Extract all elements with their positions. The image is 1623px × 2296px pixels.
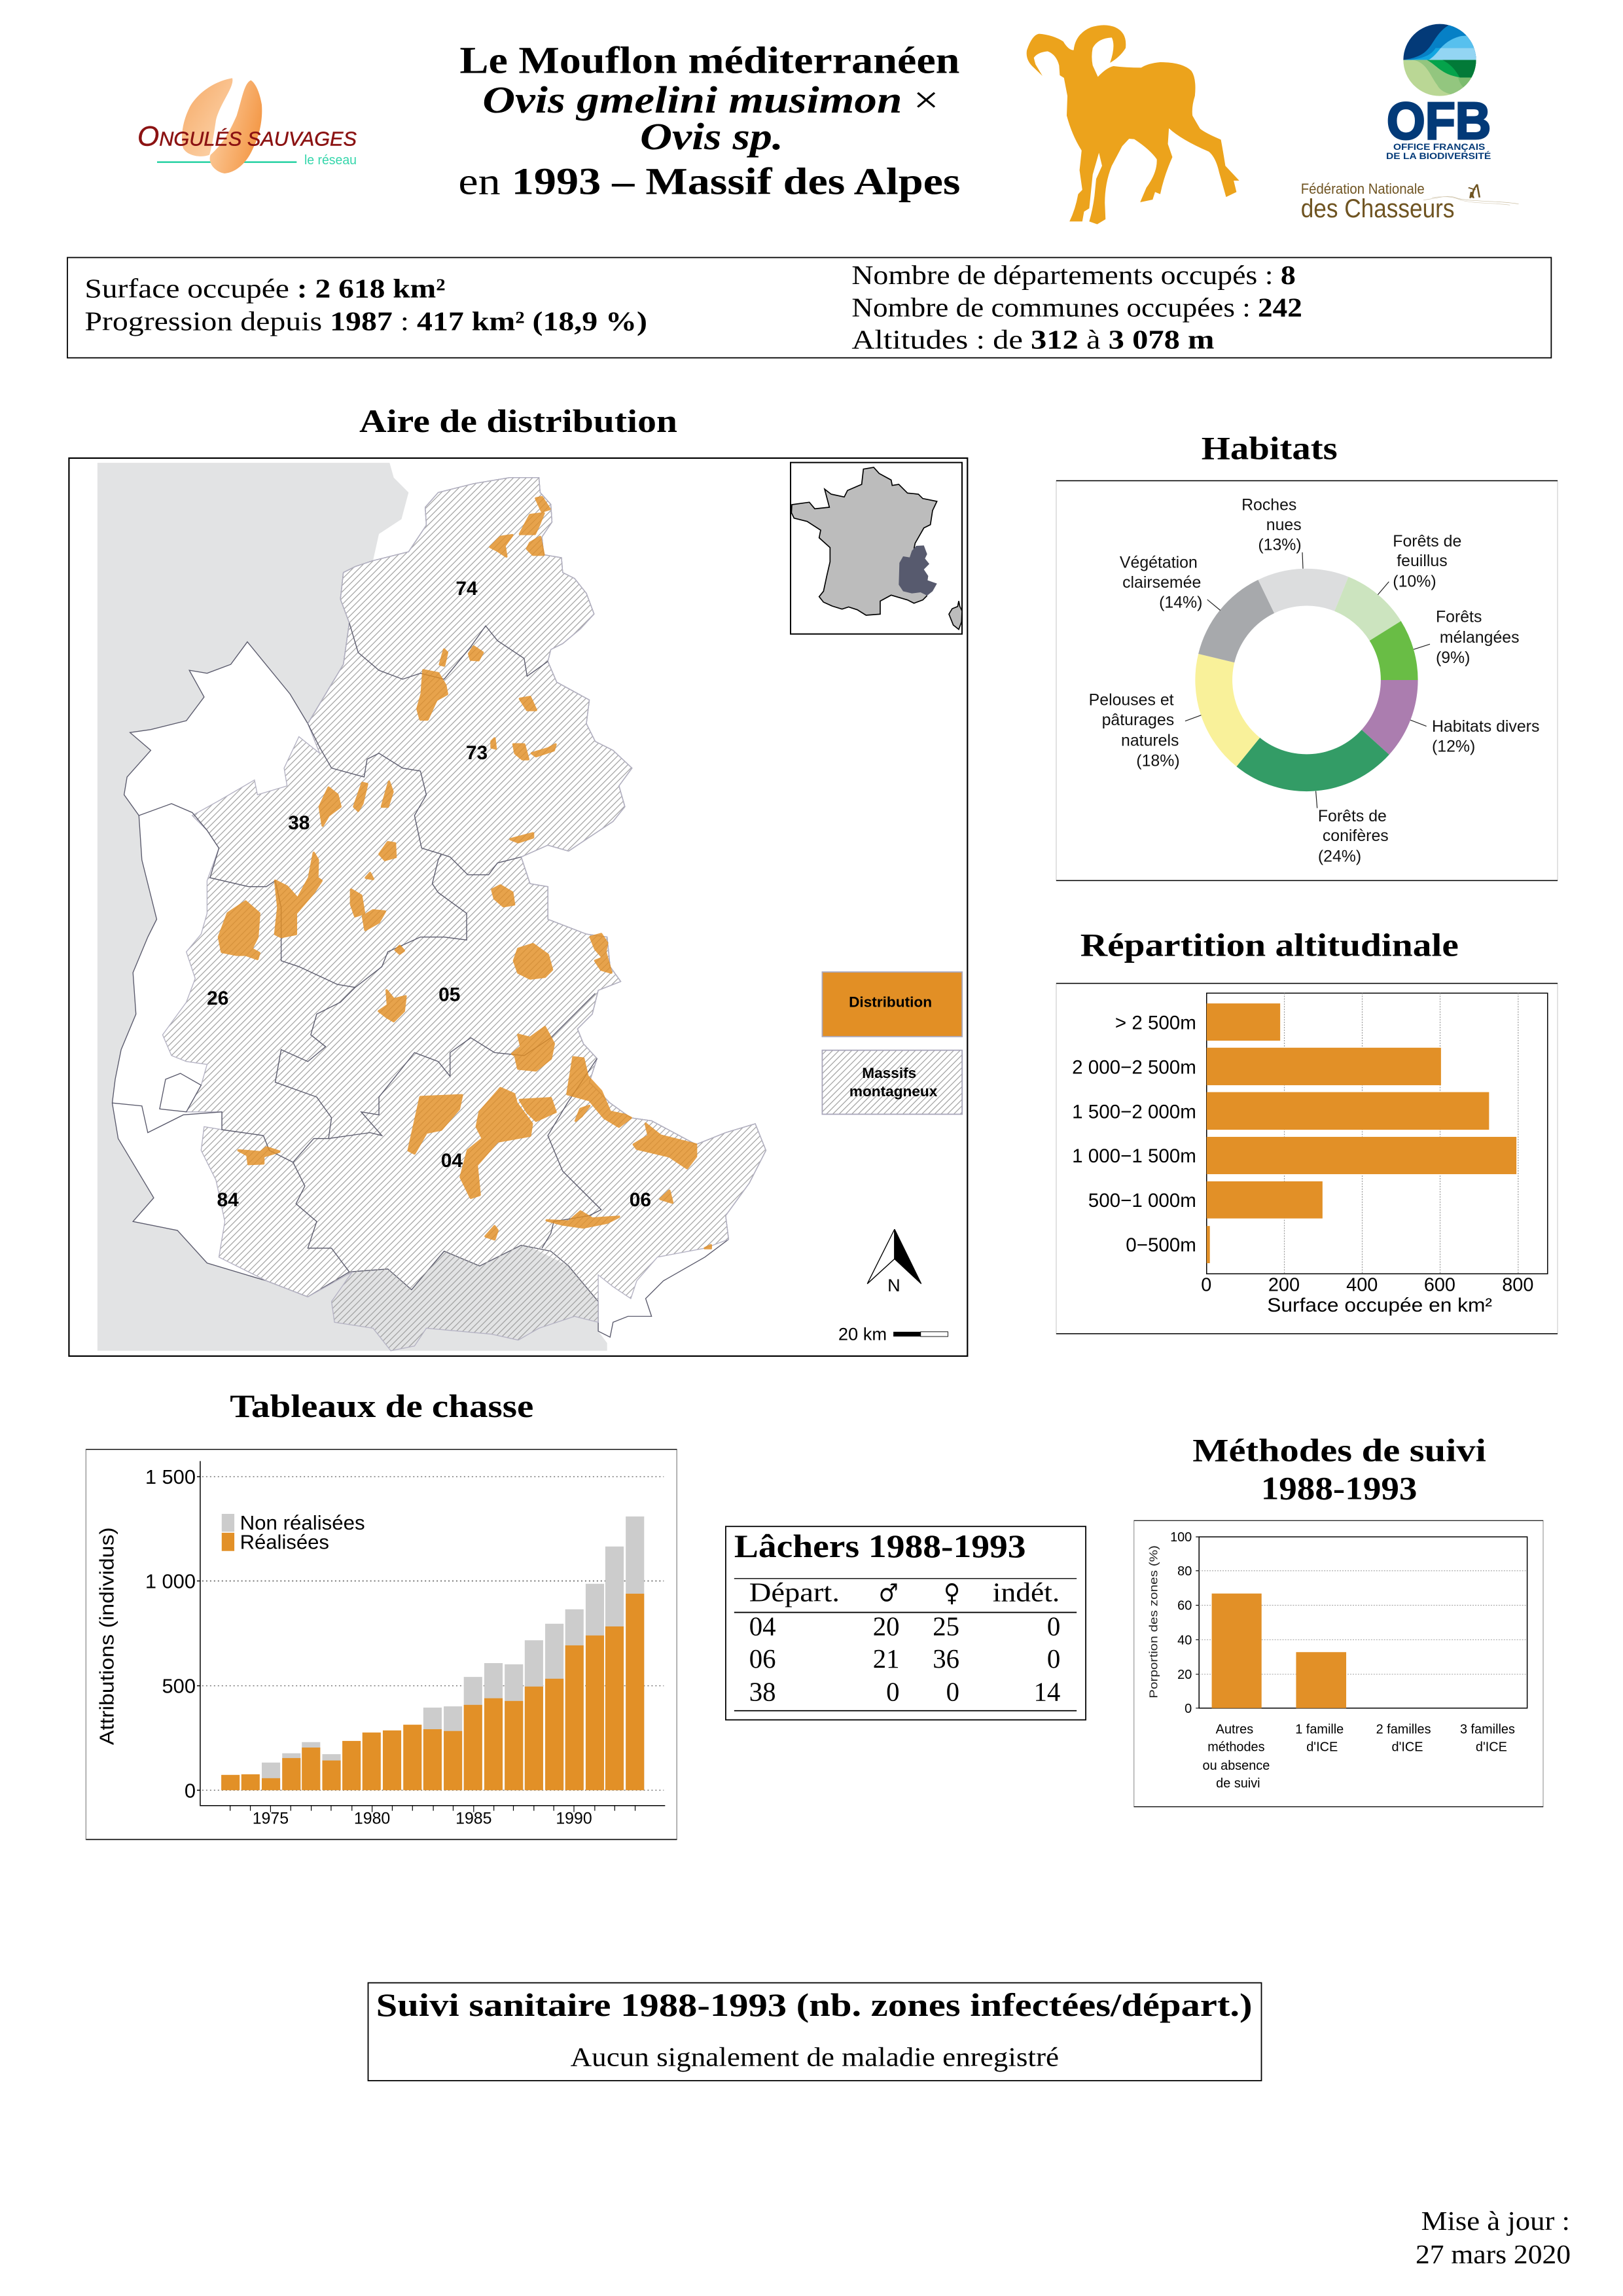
- y axis labels: 100: [1170, 1530, 1192, 1545]
- update date: [1416, 2206, 1571, 2269]
- panel: altitude bar chart: Surface occupée en km²: [1267, 1295, 1492, 1316]
- x axis labels: 1985: [455, 1810, 491, 1828]
- table rows: 20: [873, 1611, 900, 1641]
- departments base: [113, 478, 766, 1337]
- category labels: d'ICE: [1306, 1740, 1338, 1754]
- panel: key figures: Surface occupée : 2 618 km²: [84, 274, 446, 304]
- slice labels: Végétation: [1120, 553, 1198, 571]
- department labels: 05: [438, 984, 460, 1005]
- panel: monitoring methods chart: [1134, 1520, 1543, 1807]
- panel: key figures: [67, 257, 1551, 358]
- table header: ♂: [879, 1579, 899, 1607]
- slice labels: (12%): [1432, 737, 1475, 755]
- leader lines: [1185, 552, 1430, 808]
- category labels: méthodes: [1207, 1740, 1265, 1754]
- update date: 27 mars 2020: [1416, 2239, 1571, 2269]
- department labels: 73: [466, 742, 488, 764]
- bars: [1212, 1594, 1346, 1708]
- slice labels: pâturages: [1102, 711, 1174, 729]
- heading: Tableaux de chasse: Tableaux de chasse: [230, 1388, 533, 1424]
- y axis labels: 1 000: [145, 1570, 196, 1592]
- altitude labels: 2 000−2 500m: [1072, 1056, 1196, 1078]
- legend: massifs montagneux: Massifs: [862, 1065, 916, 1081]
- table rows: 06: [749, 1644, 776, 1674]
- title: Ovis gmelini musimon ×: [482, 80, 939, 121]
- table rows: 25: [933, 1611, 959, 1641]
- category labels: d'ICE: [1476, 1740, 1507, 1754]
- slice labels: Forêts: [1436, 607, 1482, 626]
- x axis labels: 800: [1502, 1274, 1533, 1295]
- table header: Départ.: [749, 1578, 840, 1607]
- axes: [200, 1461, 665, 1806]
- neighbouring areas background: [98, 463, 607, 1351]
- logo: OFB: OFFICE FRANÇAIS: [1393, 141, 1485, 152]
- table header: ♀: [944, 1579, 960, 1607]
- category labels: 2 familles: [1376, 1723, 1431, 1737]
- stacked bars: [221, 1516, 644, 1790]
- category labels: d'ICE: [1392, 1740, 1423, 1754]
- title: Ovis sp.: [640, 117, 783, 158]
- y axis title: Porportion des zones (%): [1147, 1545, 1160, 1698]
- slice labels: (10%): [1393, 572, 1436, 590]
- panel: suivi sanitaire: Suivi sanitaire 1988-1993 (nb. zones infectées/départ.): [376, 1986, 1253, 2023]
- logo: Ongulés sauvages: le réseau: [304, 152, 357, 168]
- department labels: [207, 578, 651, 1211]
- legend: [222, 1511, 365, 1554]
- legend: Réalisées: [240, 1531, 329, 1554]
- x axis labels: 1975: [253, 1810, 289, 1828]
- x axis labels: 1980: [354, 1810, 390, 1828]
- y axis labels: 60: [1177, 1599, 1192, 1613]
- category labels: Autres: [1216, 1723, 1253, 1737]
- table rows: 0: [886, 1677, 900, 1706]
- panel: hunting bag chart: [86, 1450, 677, 1839]
- slice labels: Forêts de: [1393, 532, 1461, 550]
- panel: key figures: Progression depuis 1987 : 417 km² (18,9 %): [84, 306, 647, 336]
- inset map: France: [791, 463, 962, 634]
- panel: key figures: Nombre de départements occupés : 8: [851, 260, 1296, 291]
- bars: [1207, 1003, 1516, 1263]
- table rows: 04: [749, 1611, 776, 1641]
- scale bar: 20 km: [838, 1323, 887, 1344]
- y axis labels: [1170, 1530, 1192, 1716]
- logo: OFB: [1386, 22, 1491, 161]
- slice labels: (18%): [1136, 751, 1180, 770]
- x axis labels: 400: [1346, 1274, 1378, 1295]
- scale bar: [838, 1323, 948, 1344]
- category labels: de suivi: [1216, 1776, 1260, 1791]
- slice labels: Pelouses et: [1089, 691, 1174, 709]
- y axis labels: 0: [1185, 1702, 1192, 1716]
- slice labels: (9%): [1436, 649, 1470, 667]
- x axis labels: [1201, 1274, 1533, 1295]
- altitude labels: 1 000−1 500m: [1072, 1145, 1196, 1167]
- slice labels: nues: [1266, 516, 1302, 534]
- heading: Méthodes de suivi: [1192, 1433, 1486, 1506]
- altitude labels: 1 500−2 000m: [1072, 1101, 1196, 1122]
- panel: suivi sanitaire: Aucun signalement de maladie enregistré: [571, 2042, 1059, 2072]
- donut slices: [1195, 569, 1418, 791]
- legend: distribution: [822, 972, 962, 1037]
- y axis labels: 80: [1177, 1564, 1192, 1579]
- update date: Mise à jour :: [1421, 2206, 1570, 2236]
- heading: Aire de distribution: Aire de distribution: [359, 403, 677, 439]
- department labels: 84: [217, 1189, 239, 1211]
- y axis labels: 20: [1177, 1668, 1192, 1682]
- table: Lâchers 1988-1993: [726, 1526, 1086, 1720]
- table rows: 14: [1034, 1677, 1060, 1706]
- slice labels: Habitats divers: [1432, 717, 1539, 736]
- panel: suivi sanitaire: [368, 1983, 1262, 2081]
- title: Le Mouflon méditerranéen: [459, 40, 959, 81]
- panel: habitats donut chart: [1056, 481, 1558, 880]
- category labels: [1203, 1723, 1515, 1791]
- heading: Méthodes de suivi: Méthodes de suivi: [1192, 1433, 1486, 1469]
- department labels: 26: [207, 988, 228, 1009]
- heading: Méthodes de suivi: 1988-1993: [1261, 1470, 1417, 1506]
- altitude labels: 0−500m: [1126, 1234, 1196, 1256]
- x axis labels: 600: [1424, 1274, 1455, 1295]
- slice labels: [1089, 495, 1539, 866]
- y axis labels: 0: [185, 1779, 196, 1802]
- table header: indét.: [993, 1578, 1060, 1607]
- panel: key figures: Altitudes : de 312 à 3 078 m: [851, 325, 1215, 355]
- slice labels: clairsemée: [1122, 573, 1201, 592]
- logo: Ongulés sauvages: [137, 78, 357, 173]
- slice labels: (14%): [1159, 594, 1202, 612]
- logo: OFB: DE LA BIODIVERSITÉ: [1386, 151, 1491, 161]
- panel: key figures: Nombre de communes occupées : 242: [851, 293, 1302, 323]
- slice labels: naturels: [1121, 731, 1179, 749]
- slice labels: feuillus: [1397, 552, 1448, 570]
- department boundaries: [113, 623, 601, 1272]
- category labels: ou absence: [1203, 1759, 1270, 1773]
- legend: distribution: Distribution: [849, 994, 932, 1011]
- distribution areas: [219, 497, 711, 1248]
- y axis title: Attributions (individus): [96, 1527, 118, 1745]
- table rows: 0: [946, 1677, 959, 1706]
- icon: north arrow: [867, 1229, 921, 1295]
- heading: Répartition altitudinale: Répartition altitudinale: [1080, 927, 1459, 963]
- table header: [749, 1578, 1060, 1607]
- y axis labels: 40: [1177, 1633, 1192, 1647]
- y axis labels: 1 500: [145, 1465, 196, 1488]
- slice labels: (24%): [1318, 848, 1361, 866]
- altitude labels: 500−1 000m: [1088, 1190, 1196, 1211]
- department labels: 06: [630, 1189, 651, 1211]
- slice labels: conifères: [1323, 827, 1389, 845]
- title: [458, 40, 960, 202]
- icon: mouflon silhouette: [1027, 25, 1240, 224]
- table rows: 38: [749, 1677, 776, 1706]
- panel: distribution map: [69, 458, 967, 1356]
- x axis labels: [253, 1810, 592, 1828]
- legend: massifs montagneux: montagneux: [849, 1083, 938, 1100]
- logo: OFB: OFB: [1387, 92, 1491, 150]
- table rows: 36: [933, 1644, 959, 1674]
- logo: Fédération Nationale des Chasseurs: Fédération Nationale: [1301, 181, 1425, 197]
- logo: Fédération Nationale des Chasseurs: des Chasseurs: [1301, 194, 1455, 223]
- department labels: 74: [455, 578, 478, 600]
- category labels: 1 famille: [1295, 1723, 1344, 1737]
- x axis labels: 1990: [556, 1810, 592, 1828]
- y axis labels: 500: [162, 1675, 196, 1698]
- slice labels: Roches: [1241, 495, 1296, 514]
- table rows: 0: [1047, 1611, 1060, 1641]
- slice labels: Forêts de: [1318, 807, 1387, 825]
- table: Lâchers 1988-1993: Lâchers 1988-1993: [734, 1528, 1026, 1564]
- x axis labels: 0: [1201, 1274, 1211, 1295]
- logo: Ongulés sauvages: ONGULÉS SAUVAGES: [137, 121, 357, 152]
- legend: Non réalisées: [240, 1511, 365, 1534]
- table rows: 21: [873, 1644, 900, 1674]
- department labels: 38: [288, 812, 310, 834]
- table rows: 0: [1047, 1644, 1060, 1674]
- y axis labels: [145, 1465, 196, 1802]
- table rows: [749, 1611, 1060, 1706]
- panel: altitude bar chart: [1056, 983, 1558, 1334]
- altitude labels: [1072, 1013, 1196, 1256]
- slice labels: (13%): [1258, 536, 1302, 554]
- massifs montagneux hatching: [162, 478, 766, 1351]
- slice labels: mélangées: [1440, 628, 1520, 647]
- legend: massifs montagneux: [822, 1050, 962, 1114]
- heading: Habitats: Habitats: [1202, 431, 1338, 467]
- logo: Fédération Nationale des Chasseurs: [1301, 181, 1519, 223]
- x axis labels: 200: [1268, 1274, 1300, 1295]
- title: en 1993 – Massif des Alpes: [458, 161, 960, 202]
- icon: north arrow: N: [887, 1275, 901, 1295]
- department labels: 04: [441, 1150, 463, 1172]
- category labels: 3 familles: [1460, 1723, 1515, 1737]
- altitude labels: > 2 500m: [1115, 1013, 1196, 1034]
